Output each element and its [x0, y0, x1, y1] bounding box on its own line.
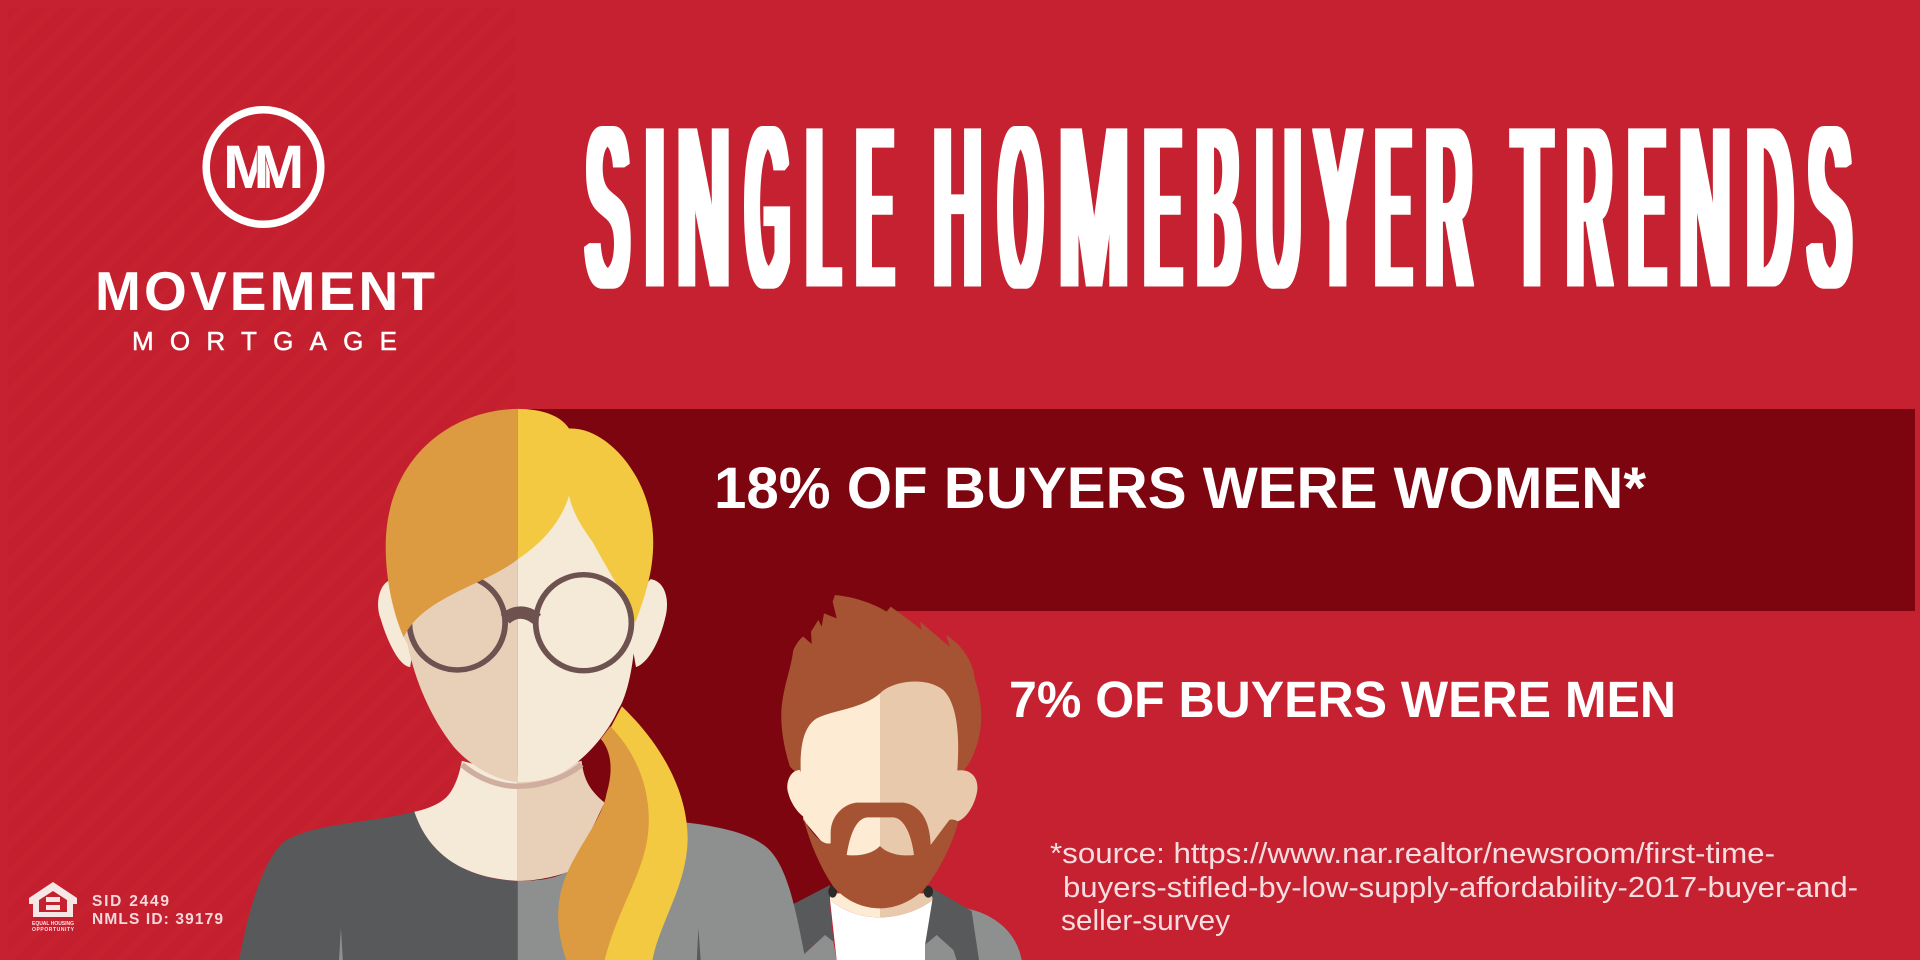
- statistic: men: 7% OF BUYERS WERE MEN: [1009, 671, 1676, 728]
- title: Y: [1316, 82, 1360, 334]
- woman chin shadow: [462, 765, 582, 786]
- title: E: [1629, 82, 1664, 334]
- logo ring: [206, 110, 321, 224]
- man jacket: [792, 885, 1022, 960]
- title: H: [934, 82, 981, 334]
- icon: equal housing opportunity: OPPORTUNITY: [32, 927, 75, 933]
- man hair: [781, 595, 981, 780]
- title: N: [1680, 82, 1730, 334]
- title: O: [1000, 82, 1041, 334]
- title: B: [1198, 82, 1240, 334]
- source line 1: *source: https://www.nar.realtor/newsroom/first-time-: [1050, 838, 1775, 870]
- woman neck: [414, 761, 605, 881]
- SID: SID 2449: [92, 893, 169, 910]
- panel: dark statistic band: [518, 409, 1915, 960]
- NMLS: NMLS ID: 39179: [92, 911, 223, 928]
- title: U: [1257, 82, 1300, 334]
- title: N: [678, 82, 729, 334]
- illustration: man: [781, 595, 1022, 960]
- woman right hair: [518, 409, 653, 645]
- license identifiers: [92, 893, 223, 928]
- title: R: [1568, 82, 1611, 334]
- source line 2: buyers-stifled-by-low-supply-affordability-2017-buyer-and-: [1063, 872, 1858, 904]
- logo subtitle: MORTGAGE: [132, 326, 397, 356]
- icon: equal housing opportunity: [29, 882, 77, 933]
- source line 3: seller-survey: [1061, 905, 1231, 937]
- man face: [787, 682, 977, 863]
- title: D: [1748, 82, 1792, 334]
- woman glasses: [409, 575, 631, 671]
- illustration: woman: [239, 409, 806, 960]
- title: E: [1145, 82, 1180, 334]
- title: E: [857, 82, 892, 334]
- statistic: women: 18% OF BUYERS WERE WOMEN*: [714, 456, 1646, 521]
- woman ears: [378, 579, 667, 667]
- logo monogram: M: [254, 133, 304, 201]
- title: L: [807, 82, 839, 334]
- panel: striped left panel: [8, 8, 515, 960]
- woman shirt: [239, 812, 806, 960]
- icon: equal housing opportunity: EQUAL HOUSING: [32, 921, 74, 927]
- source note: [1050, 838, 1858, 937]
- title: T: [1513, 82, 1551, 334]
- title: S: [587, 82, 628, 334]
- title: M: [1059, 82, 1129, 334]
- woman ponytail: [558, 706, 688, 960]
- logo: Movement Mortgage: [95, 110, 435, 356]
- woman left hair: [386, 409, 518, 637]
- title: E: [1376, 82, 1410, 334]
- woman face: [400, 495, 635, 782]
- logo monogram: M: [223, 133, 274, 201]
- title: R: [1426, 82, 1472, 334]
- man beard: [803, 803, 958, 908]
- logo wordmark: MOVEMENT: [95, 260, 435, 322]
- title: G: [747, 82, 789, 334]
- man t-shirt: [830, 900, 933, 960]
- title: I: [645, 82, 665, 334]
- man neck: [830, 893, 933, 917]
